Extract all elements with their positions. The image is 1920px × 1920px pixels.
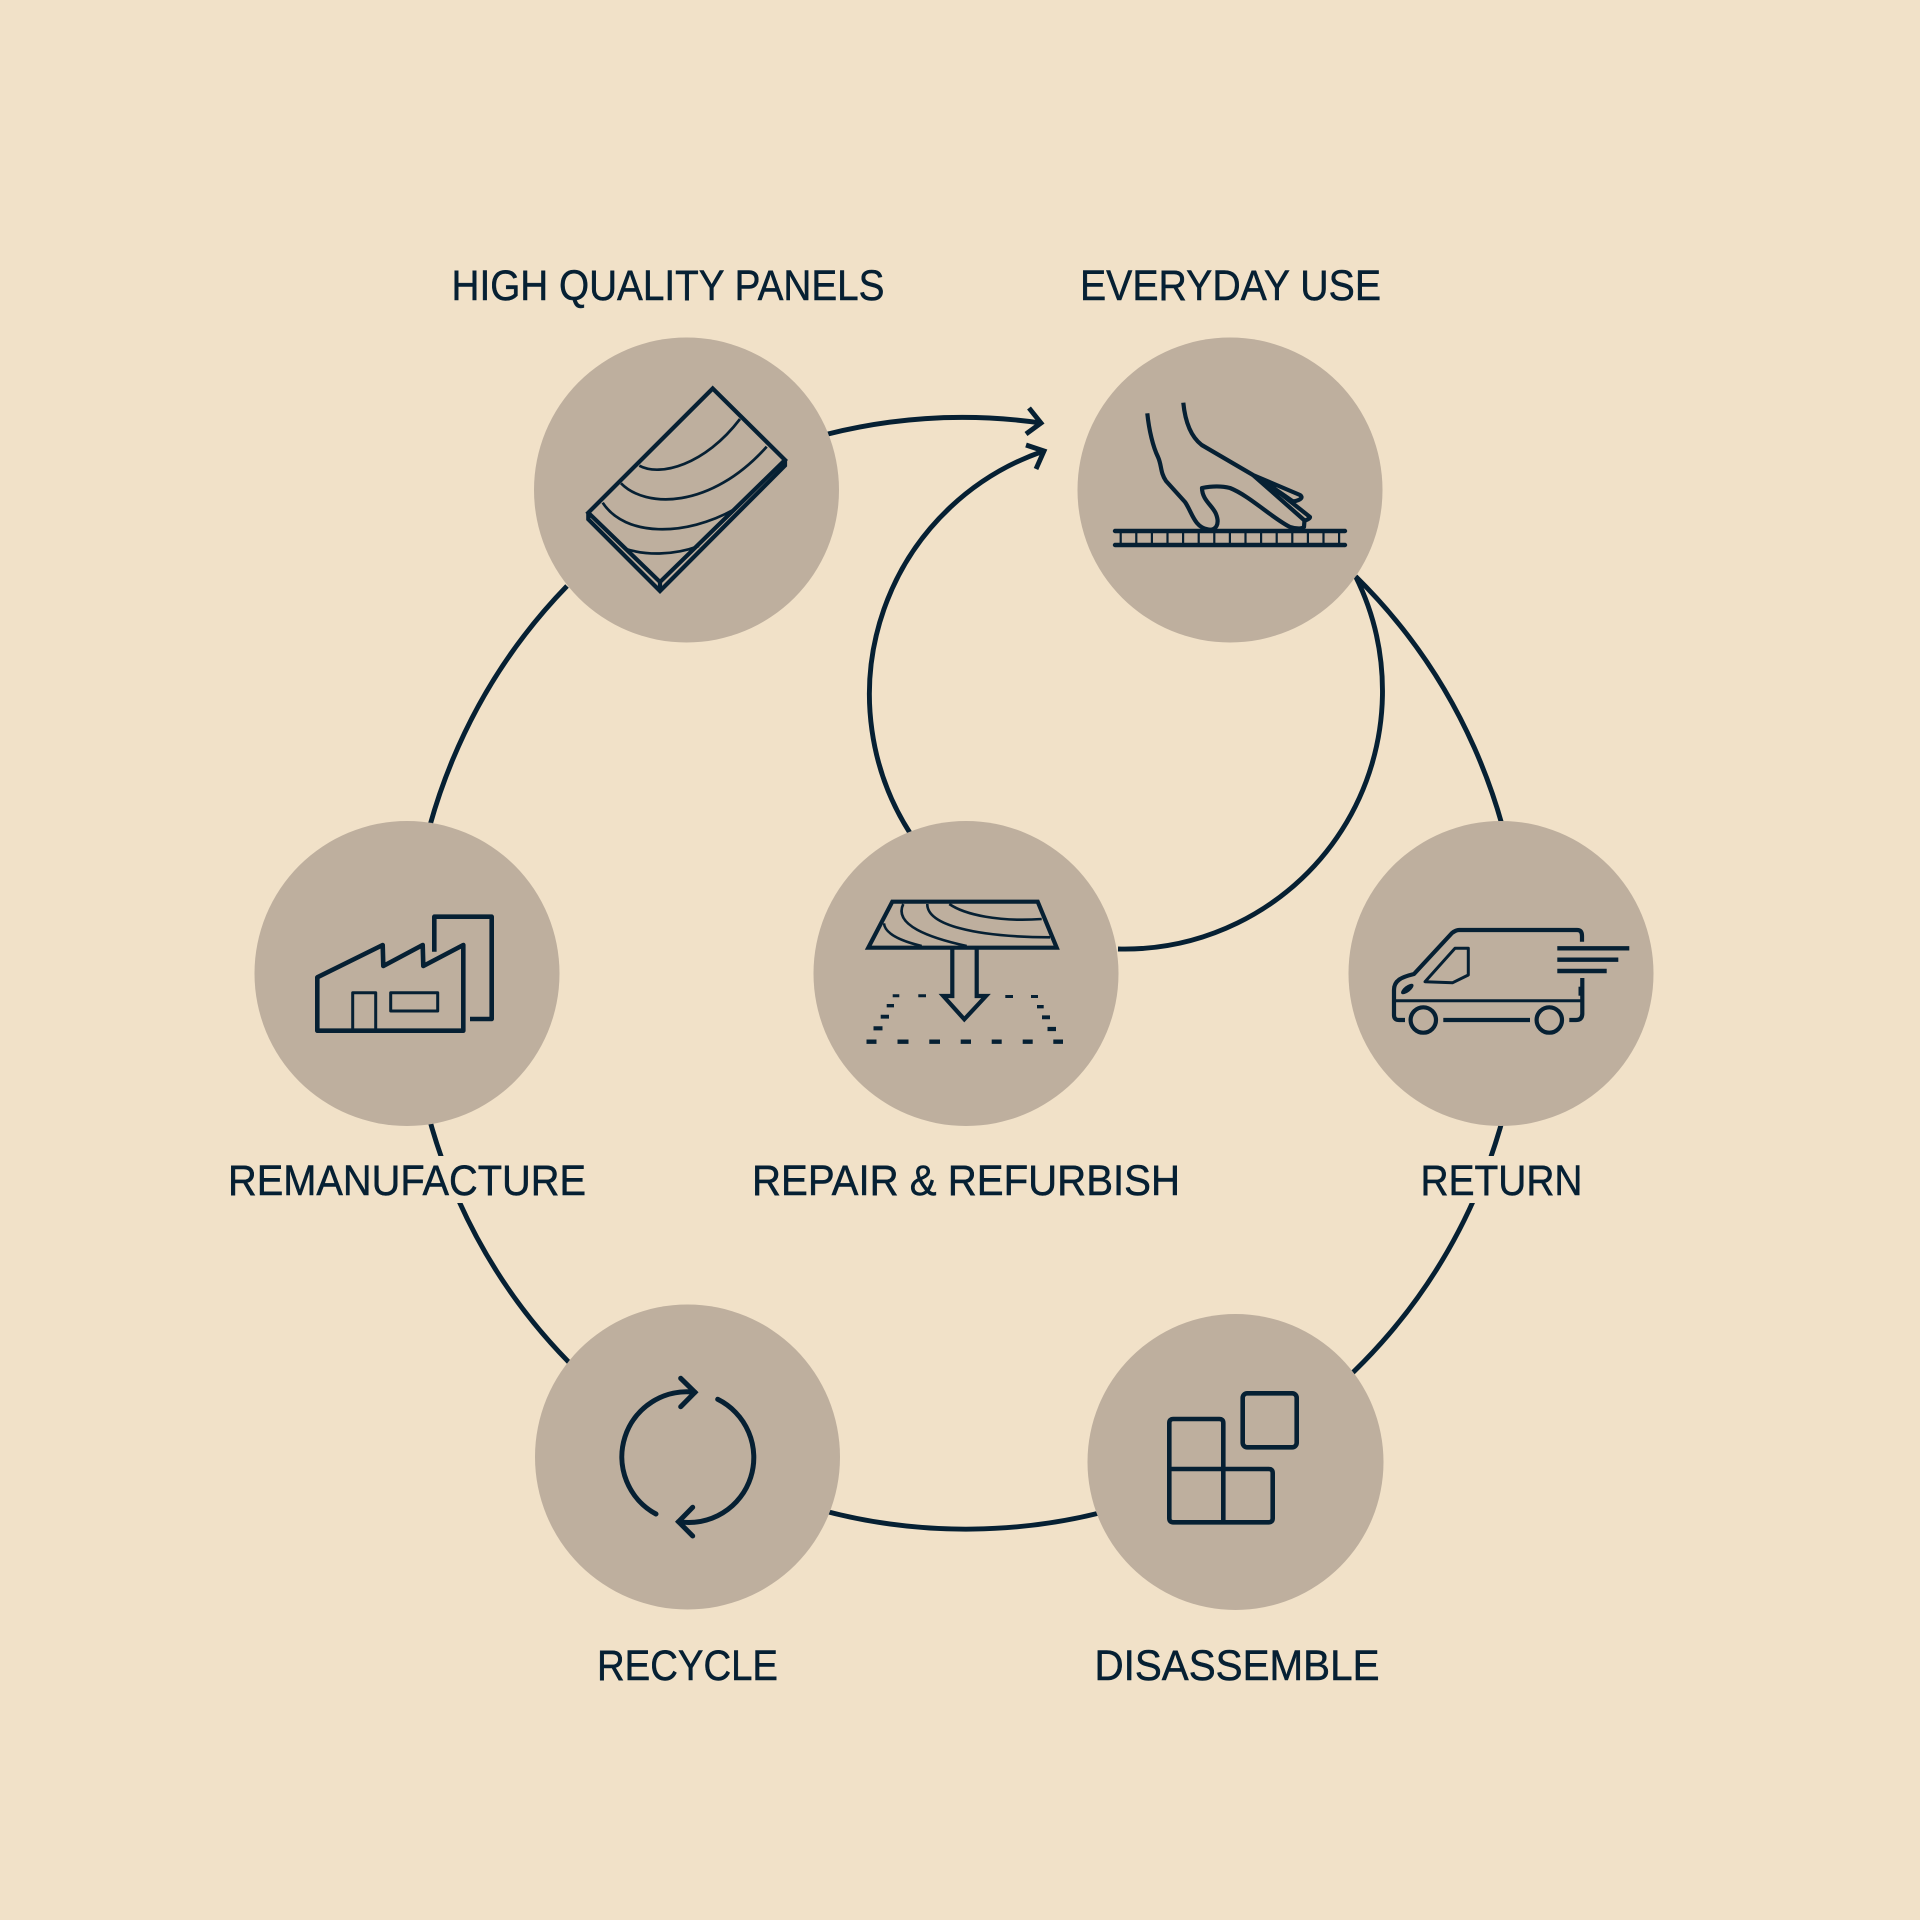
label: EVERYDAY USE bbox=[1080, 262, 1381, 310]
panel: high quality panels bbox=[452, 262, 884, 642]
circle bbox=[534, 338, 839, 642]
panel: disassemble bbox=[1088, 1314, 1384, 1690]
panel: return bbox=[1348, 821, 1654, 1205]
panel: everyday use bbox=[1078, 262, 1382, 642]
label: REMANUFACTURE bbox=[228, 1157, 586, 1205]
label: HIGH QUALITY PANELS bbox=[452, 262, 884, 310]
icon: factory bbox=[317, 917, 492, 1031]
icon: wood panel bbox=[588, 388, 785, 591]
circle bbox=[535, 1304, 840, 1610]
label: RECYCLE bbox=[597, 1642, 778, 1690]
arc: everyday use to repair and refurbish bbox=[1118, 576, 1382, 949]
icon: delivery van bbox=[1394, 930, 1629, 1033]
label: DISASSEMBLE bbox=[1094, 1642, 1380, 1690]
arrow: repair and refurbish back to everyday use bbox=[869, 445, 1044, 833]
label: REPAIR & REFURBISH bbox=[752, 1157, 1180, 1205]
icon: separated blocks bbox=[1169, 1393, 1297, 1522]
label: RETURN bbox=[1420, 1157, 1582, 1205]
panel: recycle bbox=[535, 1304, 840, 1690]
connectors: outer ring and inner repair loop bbox=[400, 408, 1530, 1529]
arc: outer ring from everyday use through return, disassemble, recycle and remanufacture bbox=[410, 576, 1522, 1529]
circle bbox=[1078, 338, 1382, 642]
icon: panel replacement bbox=[866, 902, 1063, 1042]
icon: hand touching panel bbox=[1115, 403, 1345, 545]
circle bbox=[1088, 1314, 1384, 1610]
icon: recycle arrows bbox=[622, 1378, 754, 1536]
label gap masks on the ring bbox=[400, 1156, 1530, 1203]
arrow: high quality panels to everyday use bbox=[828, 408, 1041, 434]
circle bbox=[1348, 821, 1654, 1126]
circle bbox=[814, 821, 1118, 1126]
panel: remanufacture bbox=[228, 821, 586, 1205]
panel: repair and refurbish bbox=[752, 821, 1180, 1205]
circle bbox=[254, 821, 560, 1126]
